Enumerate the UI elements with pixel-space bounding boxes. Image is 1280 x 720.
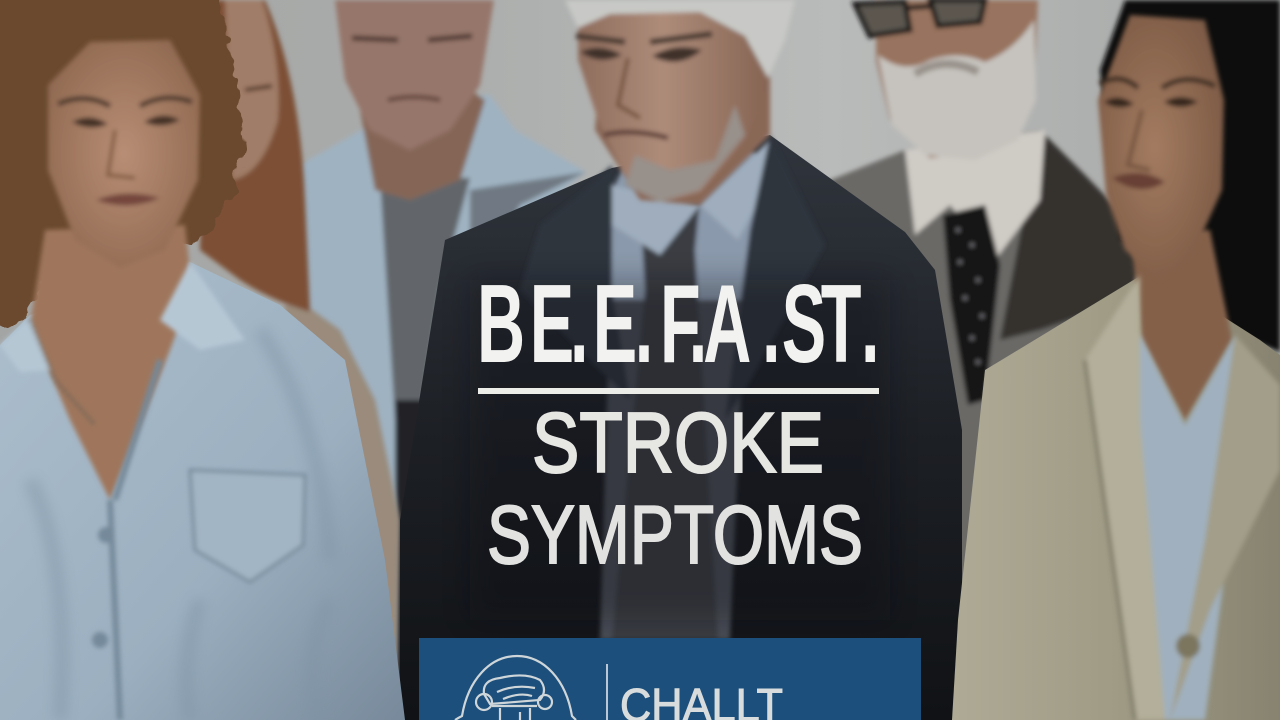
face	[48, 40, 200, 268]
curly hair	[0, 0, 245, 325]
shirt and tie	[520, 135, 825, 640]
person: center man in dark suit	[400, 0, 962, 720]
title block	[477, 263, 880, 581]
person: red-haired woman behind	[200, 0, 400, 720]
title: BE.E.F.A.ST.: BE.E.F.A.ST.	[477, 263, 880, 386]
logo banner	[419, 638, 921, 720]
icon: column capital logo	[455, 656, 576, 720]
person: older man with white beard	[818, 0, 1148, 720]
neck	[1130, 230, 1232, 420]
neck and chest	[30, 225, 192, 500]
face	[565, 0, 795, 205]
dark vignette behind the title	[470, 280, 890, 620]
black hair	[1100, 0, 1280, 352]
blue shirt and lapels	[1085, 275, 1280, 720]
person: man in back left	[300, 0, 586, 720]
face	[1098, 15, 1224, 280]
shirt	[0, 262, 405, 720]
person: dark-haired woman on the right	[952, 0, 1280, 720]
suit jacket	[400, 135, 962, 720]
person: curly-haired woman on the left	[0, 0, 405, 720]
divider	[606, 664, 608, 720]
subtitle: SYMPTOMS: SYMPTOMS	[487, 488, 863, 581]
subtitle: STROKE: STROKE	[532, 396, 824, 491]
shirt details: collar, placket and pocket	[0, 262, 305, 720]
title rule	[478, 388, 879, 394]
shirt folds	[30, 330, 330, 720]
beige jacket	[952, 270, 1280, 720]
